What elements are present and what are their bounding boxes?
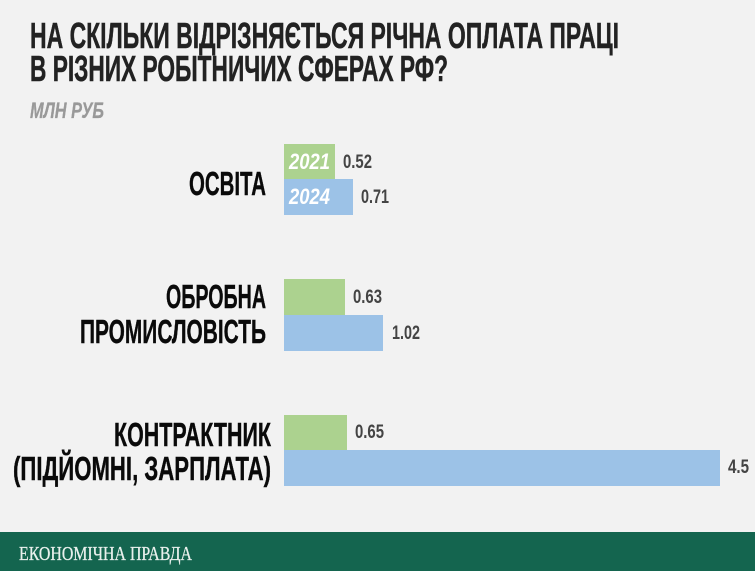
category label: контрактник: (ПІДЙОМНІ, ЗАРПЛАТА) xyxy=(13,449,271,487)
category label: обробна промисловість: ОБРОБНА xyxy=(166,278,266,315)
bar: 2024 контрактник xyxy=(284,450,720,486)
category label: контрактник xyxy=(13,416,272,487)
title xyxy=(30,15,619,89)
footer band xyxy=(0,532,755,571)
bar: 2024 освіта xyxy=(284,179,353,215)
value 0.71: 0.71 xyxy=(361,187,389,208)
group: освіта xyxy=(189,144,389,215)
bar: 2021 контрактник xyxy=(284,415,347,450)
group: обробна промисловість xyxy=(80,278,420,351)
value 0.63: 0.63 xyxy=(353,287,382,308)
bar: 2024 обробна xyxy=(284,315,383,351)
title: В РІЗНИХ РОБІТНИЧИХ СФЕРАХ РФ? xyxy=(30,48,448,89)
bar: 2021 освіта xyxy=(284,144,335,179)
value 1.02: 1.02 xyxy=(392,323,420,344)
category label: освіта: ОСВІТА xyxy=(189,165,266,202)
category label: обробна промисловість: ПРОМИСЛОВІСТЬ xyxy=(80,313,266,350)
value 0.52: 0.52 xyxy=(343,152,372,173)
unit label: МЛН РУБ xyxy=(30,98,104,123)
group: контрактник xyxy=(13,415,749,487)
bar: 2021 обробна xyxy=(284,279,345,315)
category label: обробна промисловість xyxy=(80,278,266,350)
legend year 2024: 2024 xyxy=(288,184,330,209)
value 4.5: 4.5 xyxy=(728,457,749,478)
category label: контрактник: КОНТРАКТНИК xyxy=(114,416,272,453)
footer logo text: ЕКОНОМІЧНА ПРАВДА xyxy=(19,543,192,565)
value 0.65: 0.65 xyxy=(355,422,384,443)
legend year 2021: 2021 xyxy=(288,149,330,174)
